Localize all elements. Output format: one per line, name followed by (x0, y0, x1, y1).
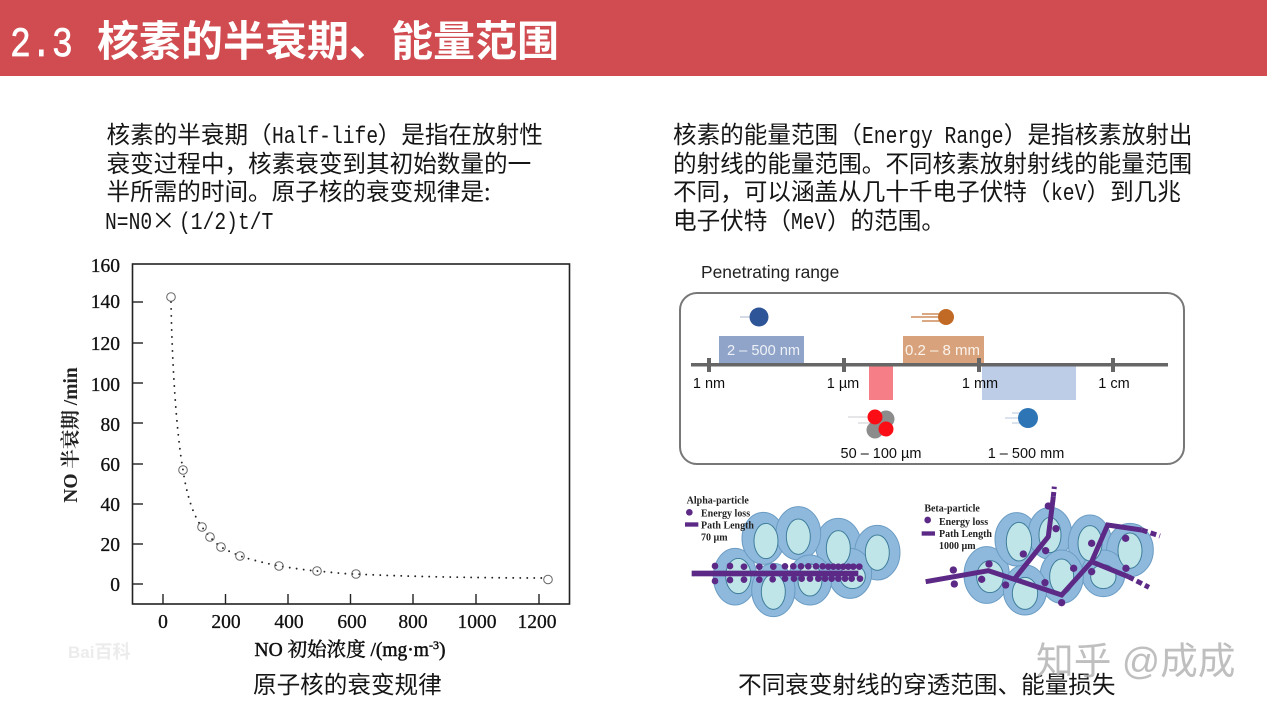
scale labels (693, 376, 1130, 392)
x axis tick labels: 600 (337, 612, 367, 633)
diagram: beta particle energy loss in cells (922, 487, 1160, 615)
x axis tick labels: 0 (158, 612, 168, 633)
text block: energy range definition: 的射线的能量范围。不同核素放射射线的能量范围 (673, 145, 1192, 179)
legend: beta particle (922, 503, 992, 552)
legend: alpha particle: Alpha-particle (687, 495, 749, 506)
icon: light blue particle (1005, 408, 1038, 428)
label: 1-500 mm: 1 – 500 mm (988, 446, 1064, 462)
y axis title: NO 半衰期 /min (59, 367, 82, 503)
range bar: 2-500 nm: 2 – 500 nm (727, 343, 800, 359)
y axis tick labels: 120 (91, 334, 120, 355)
text block: energy range definition: 核素的能量范围（ ）是指核素放射出 (673, 116, 1192, 150)
alpha path and energy loss dots (692, 563, 863, 584)
cell nuclei (726, 519, 889, 609)
heading: penetrating range: Penetrating range (701, 262, 839, 282)
legend: beta particle: 1000 µm (939, 541, 976, 552)
rounded frame (680, 293, 1184, 464)
scale labels: 1 nm (693, 376, 725, 392)
text block: half-life definition (104, 116, 543, 237)
legend: alpha particle (685, 495, 754, 544)
axis ticks (133, 302, 539, 604)
y axis tick labels: 0 (110, 575, 120, 596)
y axis tick labels (91, 256, 120, 596)
text block: half-life definition: × (152, 202, 175, 236)
range bar: 1-500 mm (982, 366, 1076, 400)
scale labels: 1 µm (827, 376, 859, 392)
text block: energy range definition: keV (1050, 181, 1086, 208)
cell nuclei (977, 517, 1142, 609)
text block: half-life definition: 核素的半衰期（ ）是指在放射性 (106, 116, 543, 150)
text block: half-life definition: Half-life (272, 124, 378, 151)
text block: half-life definition: 衰变过程中，核素衰变到其初始数量的一 (106, 145, 531, 179)
cell cluster (964, 507, 1153, 615)
text block: energy range definition: 不同，可以涵盖从几十千电子伏特（ ）到几兆 (673, 173, 1181, 207)
y axis tick labels: 100 (91, 375, 120, 396)
x axis tick labels: 800 (398, 612, 428, 633)
x axis tick labels: 1200 (518, 612, 556, 633)
x axis title: -3 (429, 638, 439, 652)
range bar: 0.2-8 mm: 0.2 – 8 mm (905, 342, 980, 359)
title: 核素的半衰期、能量范围 (97, 8, 559, 69)
scale axis (691, 358, 1168, 372)
diagram: penetrating range (680, 262, 1184, 464)
watermark: Zhihu: 知乎 @成成 (1036, 640, 1235, 682)
y axis tick labels: 80 (100, 415, 120, 436)
scale labels: 1 cm (1098, 376, 1130, 392)
icon: alpha particle cluster (848, 410, 894, 438)
beta paths and energy loss dots (926, 487, 1160, 606)
line chart: NO half-life vs initial concentration (59, 256, 570, 661)
legend: beta particle: Path Length (939, 529, 992, 540)
label: 50-100 µm: 50 – 100 µm (841, 446, 921, 462)
range bar: 50-100 µm (869, 366, 893, 400)
plot frame (132, 264, 570, 604)
watermark: Baidu: Bai百科 (68, 638, 130, 664)
range bar: 0.2-8 mm (903, 336, 984, 365)
caption: penetrating range and energy loss: 不同衰变射线的穿透范围、能量损失 (738, 666, 1116, 700)
legend: alpha particle: Path Length (701, 521, 754, 532)
text block: energy range definition: Energy Range (862, 124, 1003, 151)
y axis tick labels: 20 (100, 535, 120, 556)
range bar: 2-500 nm (719, 336, 804, 365)
icon: dark blue particle (740, 308, 768, 326)
text block: energy range definition: MeV (791, 210, 826, 237)
legend: alpha particle: Energy loss (701, 509, 750, 520)
cell cluster (713, 507, 900, 617)
text block: energy range definition: 电子伏特（ ）的范围。 (673, 202, 945, 236)
text block: half-life definition: (1/2)t/T (179, 210, 273, 237)
x axis tick labels: 400 (274, 612, 304, 633)
data points (167, 293, 552, 584)
legend: alpha particle: 70 µm (701, 533, 728, 544)
y axis tick labels: 160 (91, 256, 120, 277)
x axis tick labels: 1000 (458, 612, 496, 633)
dotted fitted curve (171, 302, 548, 578)
text block: half-life definition: 半所需的时间。原子核的衰变规律是: (106, 173, 491, 207)
scale labels: 1 mm (962, 376, 998, 392)
y axis tick labels: 140 (91, 292, 120, 313)
x axis tick labels (158, 612, 556, 633)
title: 2.3 (10, 21, 73, 69)
x axis title: NO 初始浓度 /(mg·m (255, 640, 429, 661)
y axis tick labels: 40 (100, 495, 120, 516)
legend: beta particle: Energy loss (939, 517, 988, 528)
y axis tick labels: 60 (100, 455, 120, 476)
legend: beta particle: Beta-particle (924, 503, 980, 514)
x axis tick labels: 200 (211, 612, 241, 633)
text block: energy range definition (673, 116, 1192, 237)
diagram: alpha particle energy loss in cells (685, 495, 900, 617)
caption: decay law: 原子核的衰变规律 (253, 666, 442, 700)
title banner (0, 0, 1267, 76)
x axis title: ) (439, 640, 445, 661)
text block: half-life definition: N=N0 (104, 210, 152, 237)
icon: orange particle (911, 309, 954, 325)
